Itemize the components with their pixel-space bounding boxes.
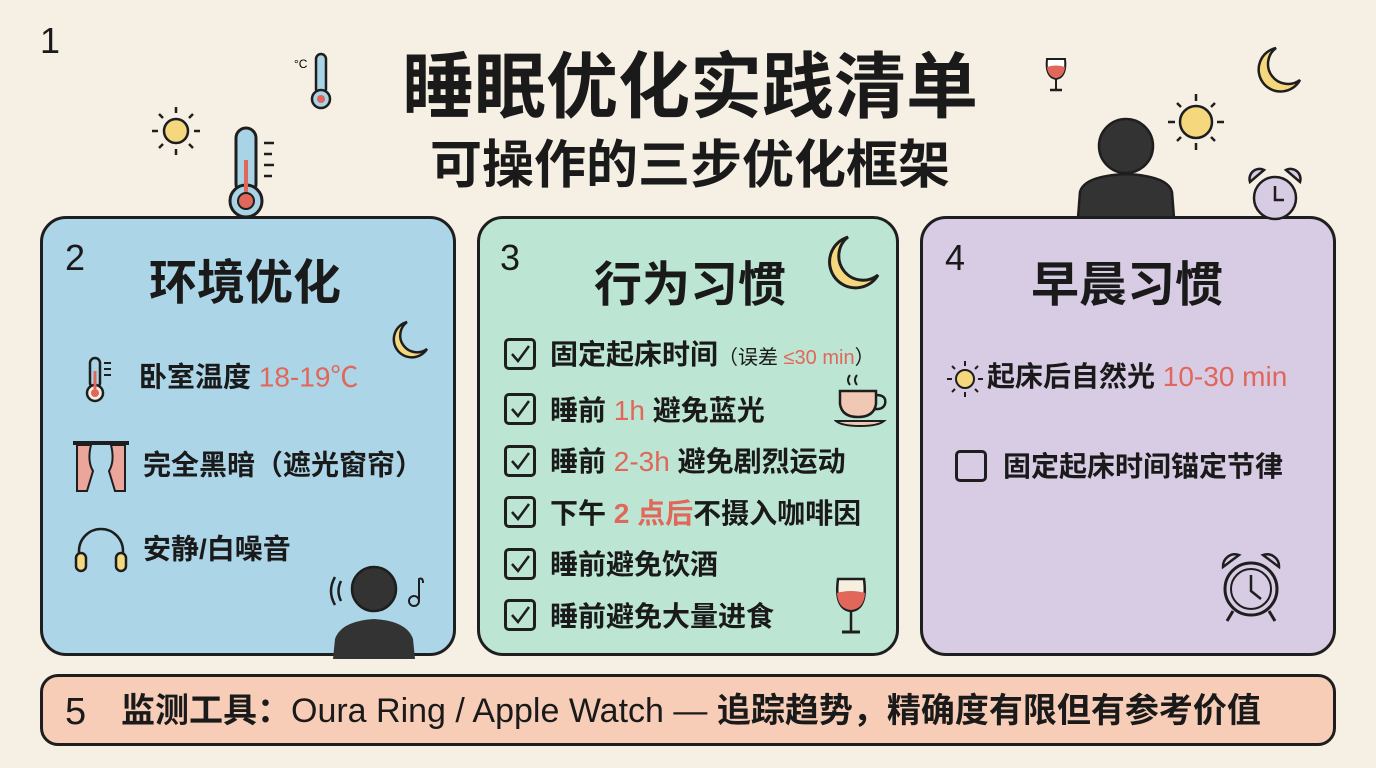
icon: sun left (152, 107, 200, 155)
heading: 早晨习惯 (1031, 259, 1223, 312)
checklist (504, 338, 875, 632)
item: darkness (73, 441, 423, 492)
page number 1: 1 (40, 20, 60, 61)
item: quiet (74, 528, 291, 572)
item: sunlight: 起床后自然光 10-30 min (987, 361, 1287, 392)
subtitle: 可操作的三步优化框架 (430, 137, 950, 195)
number 3: 3 (500, 237, 520, 278)
icon: small thermometer: °C (294, 57, 308, 71)
icon: moon top right (1257, 46, 1301, 93)
icon: small thermometer (294, 52, 332, 110)
icon: wine glass (836, 578, 866, 634)
item: quiet: 安静/白噪音 (143, 533, 291, 564)
checklist: 睡前避免大量进食 (550, 600, 774, 632)
item: temperature (86, 356, 358, 402)
title: 睡眠优化实践清单 (402, 48, 978, 128)
checklist: 睡前避免饮酒 (550, 549, 718, 580)
item: fixed wake time: 固定起床时间锚定节律 (1003, 451, 1283, 482)
heading: 环境优化 (149, 257, 341, 310)
icon: coffee cup (834, 374, 887, 427)
panel: behaviour (477, 216, 899, 656)
number 2: 2 (65, 237, 85, 278)
icon: wine glass top (1046, 58, 1066, 92)
checklist: 下午 2 点后不摄入咖啡因 (550, 498, 861, 528)
number 5: 5 (65, 691, 86, 733)
icon: big thermometer (228, 126, 274, 216)
icon: person with sound (330, 566, 424, 659)
icon: moon (828, 236, 880, 290)
item: darkness: 完全黑暗（遮光窗帘） (143, 449, 423, 480)
checklist: 睡前 1h 避免蓝光 (550, 394, 765, 426)
icon: moon (392, 320, 428, 359)
monitoring text: 监测工具：Oura Ring / Apple Watch — 追踪趋势，精确度有限但有参考价值 (121, 692, 1261, 730)
icon: person silhouette top (1076, 118, 1176, 216)
bottom bar: monitoring tools (40, 674, 1336, 746)
panel: morning (920, 216, 1336, 656)
item: temperature: 卧室温度 18-19℃ (139, 361, 358, 392)
icon: sun right (1168, 94, 1224, 150)
checklist: 固定起床时间（误差 ≤30 min） (550, 339, 875, 370)
icon: alarm clock (1222, 553, 1280, 622)
panel: environment (40, 216, 456, 656)
number 4: 4 (945, 237, 965, 278)
checklist: 睡前 2-3h 避免剧烈运动 (550, 446, 846, 477)
heading: 行为习惯 (594, 259, 786, 312)
icon: alarm clock top (1248, 168, 1302, 220)
